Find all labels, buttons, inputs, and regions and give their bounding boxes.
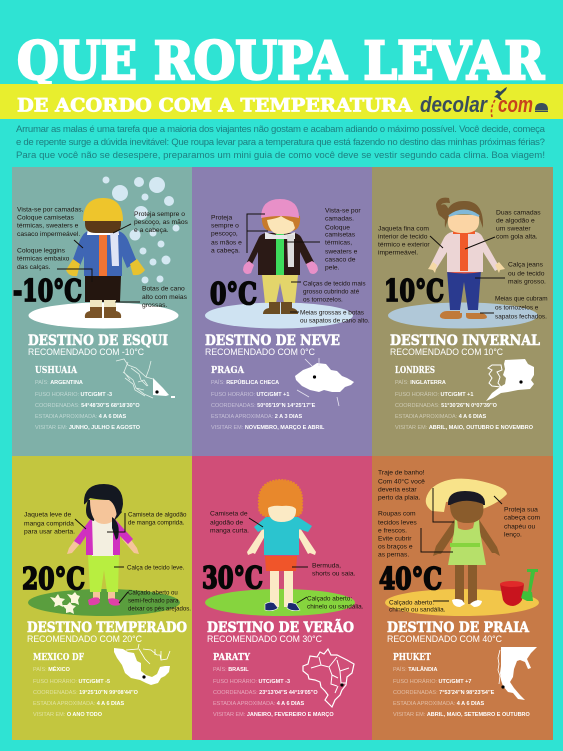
grass xyxy=(205,589,355,616)
destination details: COORDENADAS: 19°25′10″N 99°08′44″O xyxy=(33,690,139,696)
snowflakes xyxy=(102,176,180,284)
notes: camadas. xyxy=(325,216,354,222)
notes: semi-fechado para xyxy=(128,598,179,604)
destination details: FUSO HORÁRIO: UTC/GMT -3 xyxy=(213,678,290,685)
notes: manga comprida xyxy=(24,520,74,528)
destination details: LONDRES xyxy=(395,366,435,376)
heading: DESTINO DE ESQUI xyxy=(28,333,168,349)
destination details xyxy=(33,653,139,718)
figure: temperate outfit xyxy=(67,484,139,606)
notes: cabeça com xyxy=(504,514,540,522)
notes: de algodão e xyxy=(496,218,535,224)
notes xyxy=(211,208,370,324)
notes: para usar aberta. xyxy=(24,528,75,536)
notes: as pernas. xyxy=(378,552,409,558)
notes: casaco de xyxy=(325,256,356,264)
destination details: VISITAR EM: JANEIRO, FEVEREIRO E MARÇO xyxy=(213,712,334,718)
map: England xyxy=(486,359,534,401)
notes: Calça de tecido leve. xyxy=(127,564,185,572)
heading: DESTINO DE PRAIA xyxy=(387,620,530,636)
notes: os tornozelos. xyxy=(303,296,343,304)
notes: casaco impermeável. xyxy=(17,231,80,238)
snow ground xyxy=(28,302,178,328)
figure: ski outfit xyxy=(66,198,145,318)
logo: decolar.com: com xyxy=(498,92,533,117)
notes: sempre o xyxy=(211,222,239,230)
panel: destino invernal 10°C xyxy=(372,167,553,456)
grass xyxy=(28,589,180,616)
destination details: VISITAR EM: ABRIL, MAIO, SETEMBRO E OUTUBRO xyxy=(393,712,531,718)
heading: DESTINO TEMPERADO xyxy=(27,620,187,636)
notes: Roupas com xyxy=(378,510,416,518)
map: Thailand peninsula xyxy=(498,647,537,700)
intro paragraph xyxy=(16,124,546,161)
notes: alto com meias xyxy=(142,294,188,301)
destination details: ESTADIA APROXIMADA: 4 A 6 DIAS xyxy=(35,414,127,420)
notes xyxy=(378,210,548,320)
destination details: ESTADIA APROXIMADA: 4 A 6 DIAS xyxy=(33,701,125,707)
notes: Camiseta de xyxy=(210,510,248,518)
destination details: PAÍS: ARGENTINA xyxy=(35,379,83,386)
notes: Calçado aberto ou xyxy=(128,590,178,596)
destination details: FUSO HORÁRIO: UTC/GMT -5 xyxy=(33,678,110,685)
notes: Calças de tecido mais xyxy=(303,280,366,288)
panel: destino temperado 20°C xyxy=(12,456,192,740)
notes: shorts ou saia. xyxy=(312,570,356,578)
notes: Meias grossas e botas xyxy=(300,310,364,316)
destination details: MEXICO DF xyxy=(33,653,85,663)
notes: um sweater xyxy=(496,226,531,232)
subtitle band: DE ACORDO COM A TEMPERATURA xyxy=(17,94,412,116)
notes: a cabeça. xyxy=(211,248,240,254)
notes: lenço. xyxy=(504,532,522,538)
destination details: USHUAIA xyxy=(35,366,78,376)
notes: deveria estar xyxy=(378,486,417,494)
destination details: ESTADIA APROXIMADA: 2 A 3 DIAS xyxy=(211,414,303,420)
sand xyxy=(385,589,539,616)
destination details: PAÍS: INGLATERRA xyxy=(395,379,446,386)
notes: pescoço, as mãos xyxy=(134,219,189,226)
notes: Evite cubrir xyxy=(378,536,412,542)
destination details: ESTADIA APROXIMADA: 4 A 6 DIAS xyxy=(213,701,305,707)
destination details: COORDENADAS: 50°05′19″N 14°25′17″E xyxy=(211,403,316,409)
panel: destino de neve 0°C xyxy=(192,167,372,456)
notes: térmicas, sweaters e xyxy=(17,222,79,230)
heading: DESTINO DE VERÃO xyxy=(207,617,354,636)
notes: térmico e exterior xyxy=(378,242,430,248)
notes: com gola alta. xyxy=(496,234,538,240)
ground xyxy=(388,302,538,328)
notes: Coloque camisetas xyxy=(17,214,75,222)
destination details: FUSO HORÁRIO: UTC/GMT +7 xyxy=(393,678,471,685)
notes: Vista-se por camadas. xyxy=(17,206,84,214)
destination details: PAÍS: TAILÂNDIA xyxy=(393,666,437,673)
panel: destino invernal 10°C: RECOMENDADO COM 10°C xyxy=(390,347,503,358)
notes: interior de tecido xyxy=(378,234,428,240)
panel: destino temperado 20°C: RECOMENDADO COM 20°C xyxy=(27,634,142,645)
destination details: COORDENADAS: 23°13′04″S 44°19′05″O xyxy=(213,690,318,696)
notes: Vista-se por xyxy=(325,208,361,214)
notes: camisetas xyxy=(325,232,356,238)
notes: das calças. xyxy=(17,264,51,271)
notes: Calçado aberto: xyxy=(307,596,352,602)
notes: e frescos. xyxy=(378,528,407,534)
destination details xyxy=(211,366,325,431)
heading: DESTINO INVERNAL xyxy=(390,333,540,349)
notes: de manga comprida. xyxy=(128,520,185,526)
notes: os braços e xyxy=(378,544,413,550)
intro paragraph: Arrumar as malas é uma tarefa que a maioria dos viajantes não gostam e acabam adiando o máximo possível. Você decide, começa xyxy=(16,124,546,135)
temperature -10°C: -10°C xyxy=(13,274,82,309)
panel: destino de verão 30°C: RECOMENDADO COM 30°C xyxy=(207,634,322,645)
notes: chinelo ou sandália. xyxy=(307,604,364,610)
temperature 10°C: 10°C xyxy=(384,274,444,309)
panel: destino de neve 0°C: RECOMENDADO COM 0°C xyxy=(205,347,315,358)
notes: Proteja xyxy=(211,214,232,222)
panel: destino de esqui -10°C: RECOMENDADO COM -10°C xyxy=(28,347,144,358)
snow ground xyxy=(205,302,353,328)
notes: Meias que cubram xyxy=(495,296,548,302)
temperature 30°C: 30°C xyxy=(202,561,263,596)
destination details: PHUKET xyxy=(393,653,431,663)
temperature 20°C: 20°C xyxy=(22,562,85,597)
notes: algodão de xyxy=(210,520,243,526)
notes: grossas. xyxy=(142,302,167,309)
figure: beach outfit xyxy=(426,479,507,607)
destination details: COORDENADAS: 7°53′24″N 98°23′54″E xyxy=(393,690,495,696)
notes xyxy=(17,206,189,309)
destination details: COORDENADAS: 51°30′26″N 0°07′39″O xyxy=(395,403,498,409)
panel: destino de praia 40°C: RECOMENDADO COM 40°C xyxy=(387,634,502,645)
destination details xyxy=(393,653,531,718)
destination details: PAÍS: BRASIL xyxy=(213,666,249,673)
notes: pele. xyxy=(325,264,340,272)
notes: Traje de banho! xyxy=(378,470,425,476)
notes xyxy=(24,512,191,612)
notes: Calça jeans xyxy=(508,262,544,268)
destination details: ESTADIA APROXIMADA: 4 A 6 DIAS xyxy=(395,414,487,420)
map: Prague xyxy=(295,358,354,406)
notes: manga curta. xyxy=(210,528,249,534)
figure: snow outfit xyxy=(243,199,318,314)
notes: sapatos fechados. xyxy=(495,314,547,320)
notes: Proteja sua xyxy=(504,506,538,514)
notes: sweaters e xyxy=(325,248,358,256)
destination details xyxy=(213,653,334,718)
notes: e a cabeça. xyxy=(134,227,169,234)
notes: Botas de cano xyxy=(142,286,185,292)
destination details: VISITAR EM: JUNHO, JULHO E AGOSTO xyxy=(35,425,141,431)
destination details: VISITAR EM: ABRIL, MAIO, OUTUBRO E NOVEMBRO xyxy=(395,425,534,431)
temperature 0°C: 0°C xyxy=(210,277,257,312)
logo: decolar.com xyxy=(420,87,548,117)
notes xyxy=(378,470,540,614)
notes: Jaqueta fina com xyxy=(378,226,429,232)
figure: summer outfit xyxy=(247,480,316,611)
notes: Duas camadas xyxy=(496,210,541,216)
notes: Camiseta de algodão xyxy=(128,512,187,518)
destination details: PRAGA xyxy=(211,366,245,376)
notes: ou de tecido xyxy=(508,270,545,278)
notes xyxy=(210,510,364,610)
notes: ou sapatos de cano alto. xyxy=(300,318,370,324)
map: Brazil xyxy=(303,649,354,707)
notes: pescoço, xyxy=(211,230,238,238)
bucket and shovel xyxy=(500,569,538,606)
destination details: FUSO HORÁRIO: UTC/GMT +1 xyxy=(211,391,289,398)
notes: Bermuda, xyxy=(312,562,341,570)
panel: destino de praia 40°C xyxy=(372,456,553,740)
notes: deixar os pés arejados. xyxy=(128,606,191,612)
destination details: PAÍS: REPÚBLICA CHECA xyxy=(211,379,279,386)
figure: winter outfit xyxy=(428,198,505,319)
destination details: VISITAR EM: O ANO TODO xyxy=(33,712,103,718)
notes: Proteja sempre o xyxy=(134,211,185,218)
map: Ushuaia xyxy=(116,359,175,398)
destination details xyxy=(35,366,141,431)
destination details: COORDENADAS: 54°48′30″S 68°18′30″O xyxy=(35,403,140,409)
destination details: ESTADIA APROXIMADA: 4 A 6 DIAS xyxy=(393,701,485,707)
notes: tecidos leves xyxy=(378,520,417,526)
notes: Calçado aberto: xyxy=(389,600,434,606)
subtitle band xyxy=(0,84,563,119)
panel: destino de verão 30°C xyxy=(192,456,372,740)
destination details: VISITAR EM: NOVEMBRO, MARÇO E ABRIL xyxy=(211,425,325,431)
notes: Jaqueta leve de xyxy=(24,512,72,518)
destination details: FUSO HORÁRIO: UTC/GMT +1 xyxy=(395,391,473,398)
notes: Coloque xyxy=(325,224,350,232)
destination details: PARATY xyxy=(213,653,251,663)
map: Mexico xyxy=(114,644,170,685)
notes: os tornozelos e xyxy=(495,304,539,312)
notes: as mãos e xyxy=(211,240,242,246)
destination details: PAÍS: MÉXICO xyxy=(33,665,71,673)
intro paragraph: e de repente surge a dúvida inevitável: Que roupa levar para a temperatura que está fazendo no destino das minhas próximas férias? xyxy=(16,137,545,148)
notes: térmicas embaixo xyxy=(17,256,70,262)
intro paragraph: Para que você não se desespere, preparamos um mini guia de como você deve se vestir segundo cada clima. Boa viagem! xyxy=(16,150,545,161)
notes: Coloque leggins xyxy=(17,248,66,254)
notes: impermeável. xyxy=(378,250,418,256)
temperature 40°C: 40°C xyxy=(379,562,442,597)
panel: destino de esqui -10°C xyxy=(12,167,192,456)
notes: chinelo ou sandália. xyxy=(389,606,446,614)
notes: Com 40°C você xyxy=(378,478,425,486)
destination details: FUSO HORÁRIO: UTC/GMT -3 xyxy=(35,391,112,398)
destination details xyxy=(395,366,534,431)
notes: perto da plaia. xyxy=(378,494,421,502)
notes: chapéu ou xyxy=(504,524,536,530)
flowers xyxy=(50,592,80,614)
notes: térmicas, xyxy=(325,240,352,246)
notes: grosso cubrindo até xyxy=(303,288,360,296)
logo: decolar.com: decolar xyxy=(420,92,488,117)
notes: mais grosso. xyxy=(508,278,546,286)
heading: DESTINO DE NEVE xyxy=(205,333,340,349)
